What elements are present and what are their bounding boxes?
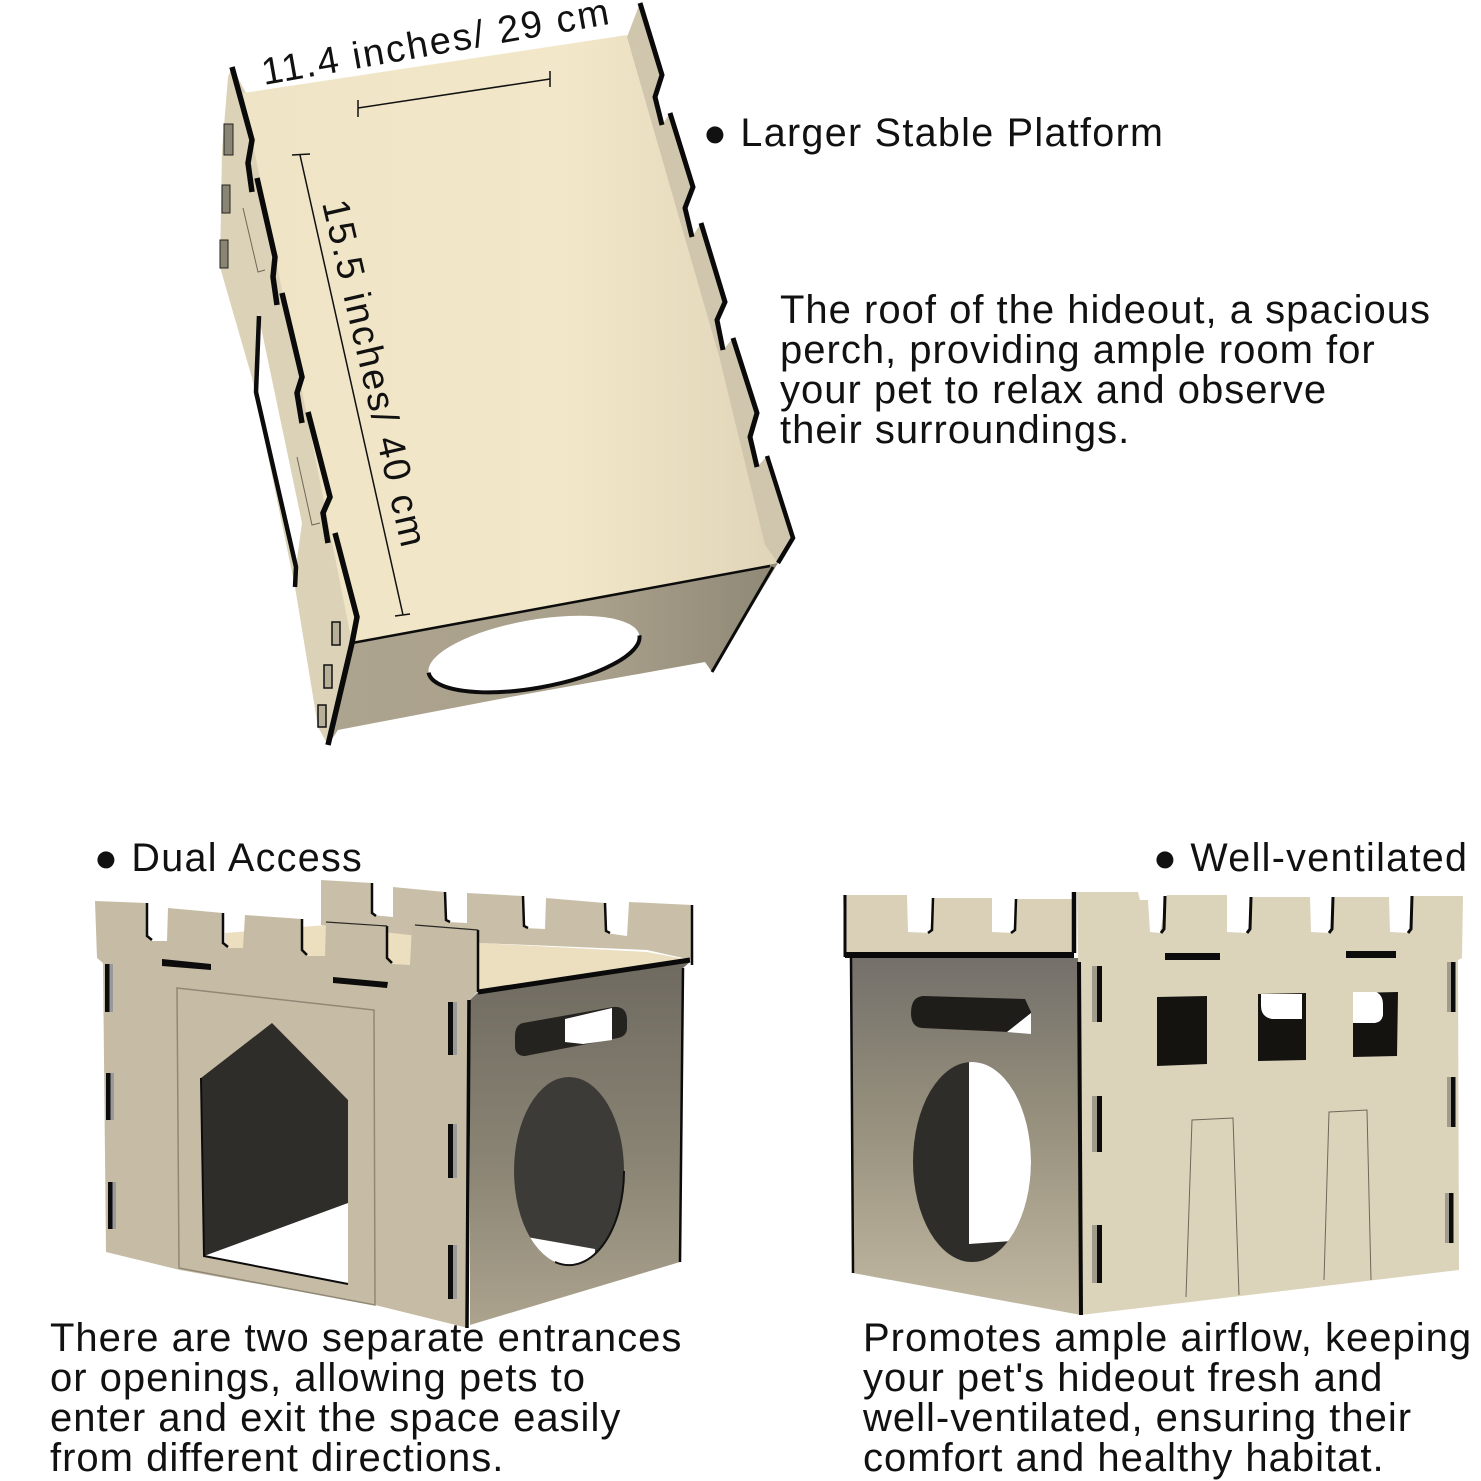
corner and side edges — [851, 958, 1081, 1315]
side wall — [470, 962, 690, 1325]
left wall edges — [845, 892, 1074, 957]
text block: well-ventilated description: comfort and healthy habitat. — [863, 1436, 1385, 1480]
front crenellated wall — [95, 901, 478, 1328]
left wall tabs — [220, 124, 233, 268]
heading: dual access: ● Dual Access — [94, 836, 363, 880]
right wall slots — [1165, 951, 1396, 960]
heading: well-ventilated: ● Well-ventilated — [1153, 836, 1468, 880]
right wall ramp outlines — [1186, 1110, 1371, 1297]
right wall notch edges — [1161, 896, 1412, 933]
text block: well-ventilated description: well-ventilated, ensuring their — [862, 1396, 1412, 1440]
depth label: 15.5 inches/ 40 cm — [313, 196, 434, 553]
text block: dual access description: There are two separate entrances — [50, 1316, 682, 1360]
front wall top edges — [326, 922, 478, 930]
wall side tabs — [105, 964, 457, 1299]
illustration: dual access hideout — [95, 880, 692, 1328]
front wall slots — [162, 959, 388, 988]
right wall tabs — [1092, 962, 1456, 1283]
front doorway opening — [201, 1023, 348, 1284]
right wall windows — [1157, 992, 1398, 1066]
right wall crenellated edge — [640, 3, 793, 563]
right crenellated wall — [1077, 892, 1463, 1315]
text block: dual access description: or openings, allowing pets to — [50, 1356, 586, 1400]
text block: well-ventilated description: Promotes ample airflow, keeping — [863, 1316, 1472, 1360]
front wall oval opening — [423, 602, 645, 706]
front wall notch edges — [147, 903, 478, 992]
back crenellated wall — [321, 880, 692, 960]
text block: roof description: perch, providing ample room for — [780, 328, 1376, 372]
roof front edge — [352, 566, 770, 643]
roof panel — [243, 35, 778, 643]
front doorway outline — [177, 988, 375, 1305]
text block: roof description: their surroundings. — [780, 408, 1130, 452]
left wall oval — [913, 1062, 1031, 1262]
left wall window — [256, 313, 302, 587]
left wall slot — [911, 996, 1031, 1034]
side wall oval opening — [510, 1077, 624, 1275]
width dimension line — [358, 71, 550, 117]
text block: roof description: The roof of the hideout, a spacious — [780, 288, 1431, 332]
text block: well-ventilated description: your pet's hideout fresh and — [863, 1356, 1383, 1400]
left dark side wall — [851, 958, 1081, 1315]
left crenellated wall — [843, 895, 1073, 953]
depth dimension line — [292, 154, 410, 616]
front wall — [328, 563, 778, 745]
front wall right edge — [712, 567, 773, 672]
front wall tabs — [318, 622, 340, 727]
text block: dual access description: from different directions. — [50, 1436, 504, 1480]
left wall slit outlines — [243, 208, 320, 525]
roof surface — [225, 925, 690, 992]
right wall strip — [627, 3, 793, 563]
text block: roof description: your pet to relax and observe — [780, 368, 1327, 412]
corner and roof edges — [467, 960, 690, 1328]
text block: dual access description: enter and exit the space easily — [50, 1396, 621, 1440]
doorway floor — [201, 1078, 348, 1284]
side wall slot — [515, 1007, 627, 1056]
back wall notch edges — [372, 883, 692, 965]
illustration: well-ventilated hideout — [843, 892, 1463, 1315]
left crenellated edge — [232, 67, 357, 745]
heading: larger stable platform: ● Larger Stable Platform — [703, 111, 1164, 155]
illustration: hideout top view — [220, 0, 793, 745]
left side wall — [220, 67, 357, 745]
